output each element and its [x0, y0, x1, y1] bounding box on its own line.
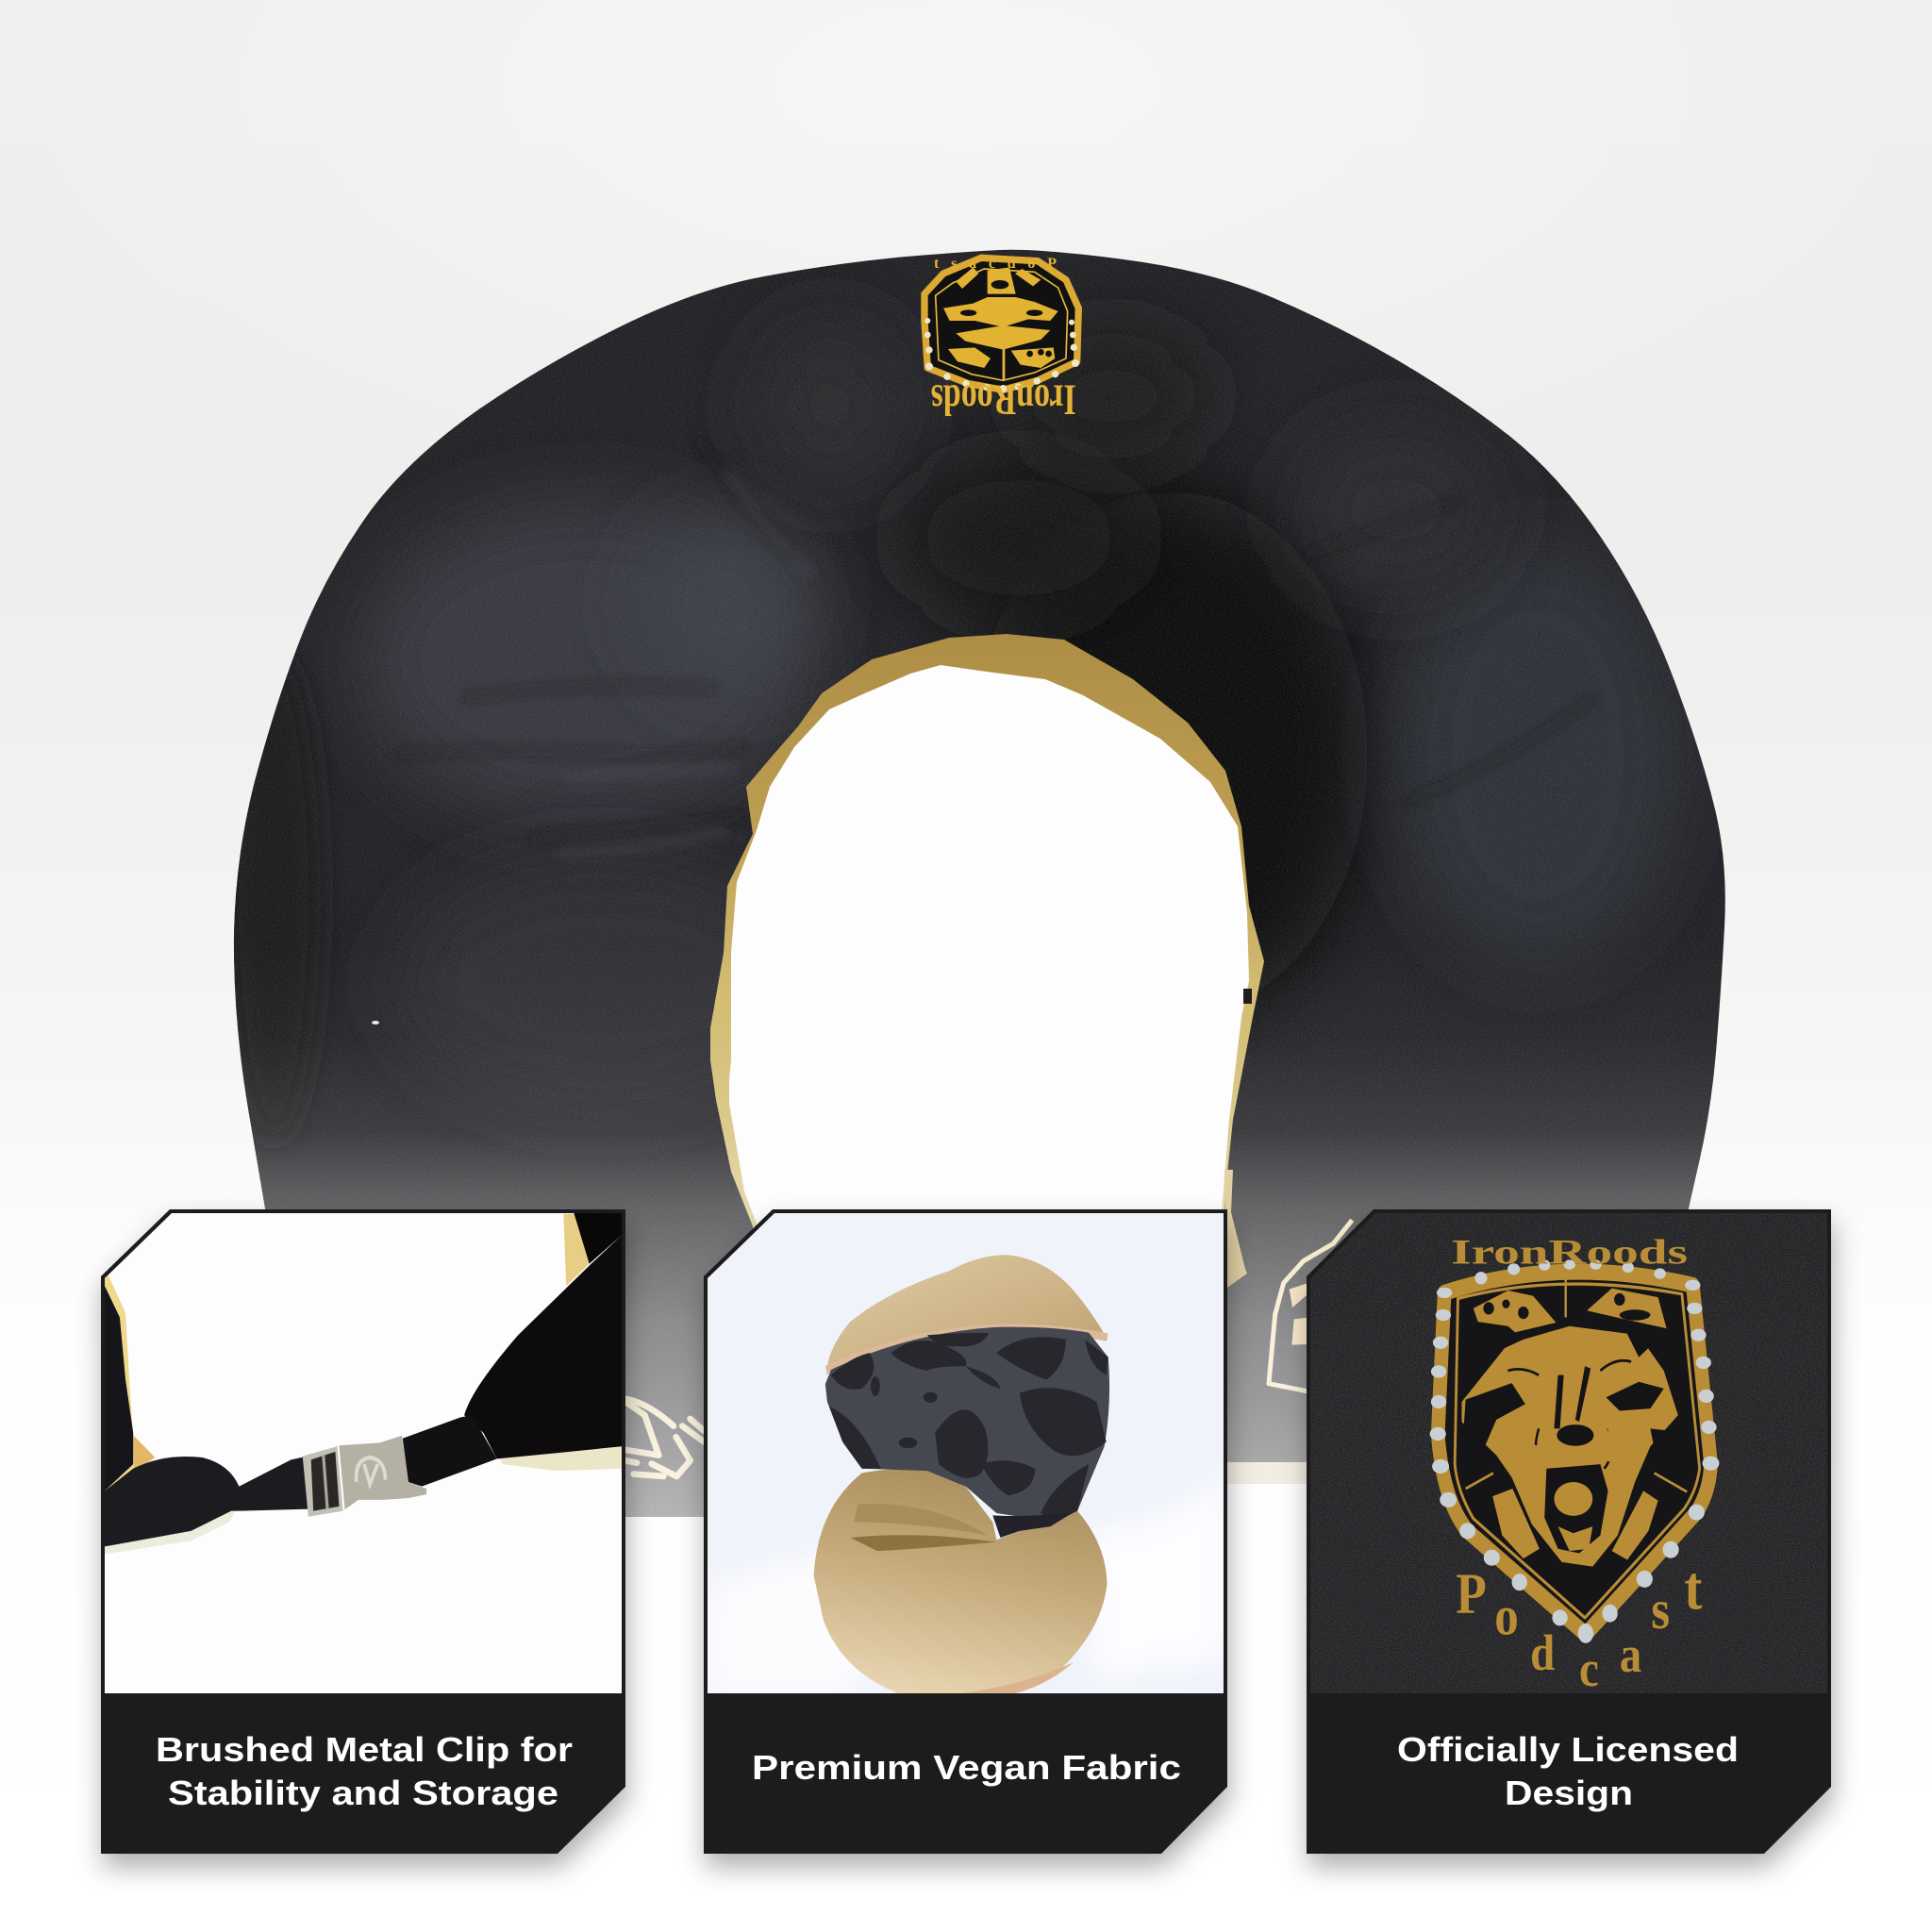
card: officially licensed design: [1302, 1208, 1840, 1854]
lower tan donut: [814, 1469, 1107, 1696]
wolf head: [1462, 1326, 1678, 1567]
photo: strap and buckle: [94, 1208, 632, 1698]
camo fabric: [825, 1327, 1109, 1522]
main pillow photo: [234, 249, 1725, 1517]
faded lower right logo: [1269, 1220, 1352, 1391]
top embroidered logo: [924, 256, 1079, 424]
fabric wrinkles: [434, 679, 1592, 794]
caption: Brushed Metal Clip for: [156, 1730, 573, 1769]
crest lettering: t: [1684, 1555, 1703, 1623]
caption: Design: [1505, 1774, 1633, 1812]
crest lettering: s: [1651, 1578, 1670, 1641]
faded lower left logo: [625, 1399, 704, 1476]
crest lettering: c: [1579, 1641, 1599, 1697]
top embroidered logo: IronRoods: [931, 375, 1076, 424]
zipper pull: [1243, 989, 1252, 1004]
card: brushed metal clip: [94, 1208, 632, 1854]
caption: [156, 1730, 573, 1812]
card frame: [101, 1209, 625, 1854]
gold inner trim: [710, 634, 1264, 1566]
center opening: [729, 665, 1249, 1566]
top embroidered logo: tsacdoP: [934, 256, 1057, 272]
buckle emblem: [357, 1457, 385, 1484]
dice and headphone shapes: [1474, 1289, 1667, 1560]
pillow body: [189, 226, 1774, 1547]
pillow bottom fade overlay: [0, 943, 1932, 1519]
card: premium vegan fabric: [698, 1208, 1236, 1854]
faded trim beside right card: [1224, 1170, 1247, 1288]
card frame: [1307, 1209, 1831, 1854]
caption: Officially Licensed: [1397, 1730, 1739, 1769]
faded bottom seam: [1227, 1462, 1312, 1484]
crest lettering: a: [1620, 1626, 1641, 1683]
crest lettering: [1451, 1234, 1703, 1697]
crest lettering: o: [1494, 1585, 1519, 1646]
card frame: [704, 1209, 1227, 1854]
crest lettering: P: [1456, 1563, 1487, 1626]
crest band: [1438, 1272, 1710, 1634]
photo: folded pillow: [698, 1208, 1236, 1698]
crest lettering: d: [1530, 1624, 1555, 1681]
crest lettering: IronRoods: [1451, 1234, 1688, 1272]
rhinestone dots: [1430, 1259, 1719, 1643]
upper tan shell: [826, 1255, 1108, 1375]
caption: Premium Vegan Fabric: [752, 1748, 1181, 1787]
caption: Stability and Storage: [168, 1774, 558, 1812]
lint speck: [372, 1021, 379, 1024]
photo: embroidered crest: [1302, 1208, 1840, 1698]
caption: [1397, 1730, 1739, 1812]
